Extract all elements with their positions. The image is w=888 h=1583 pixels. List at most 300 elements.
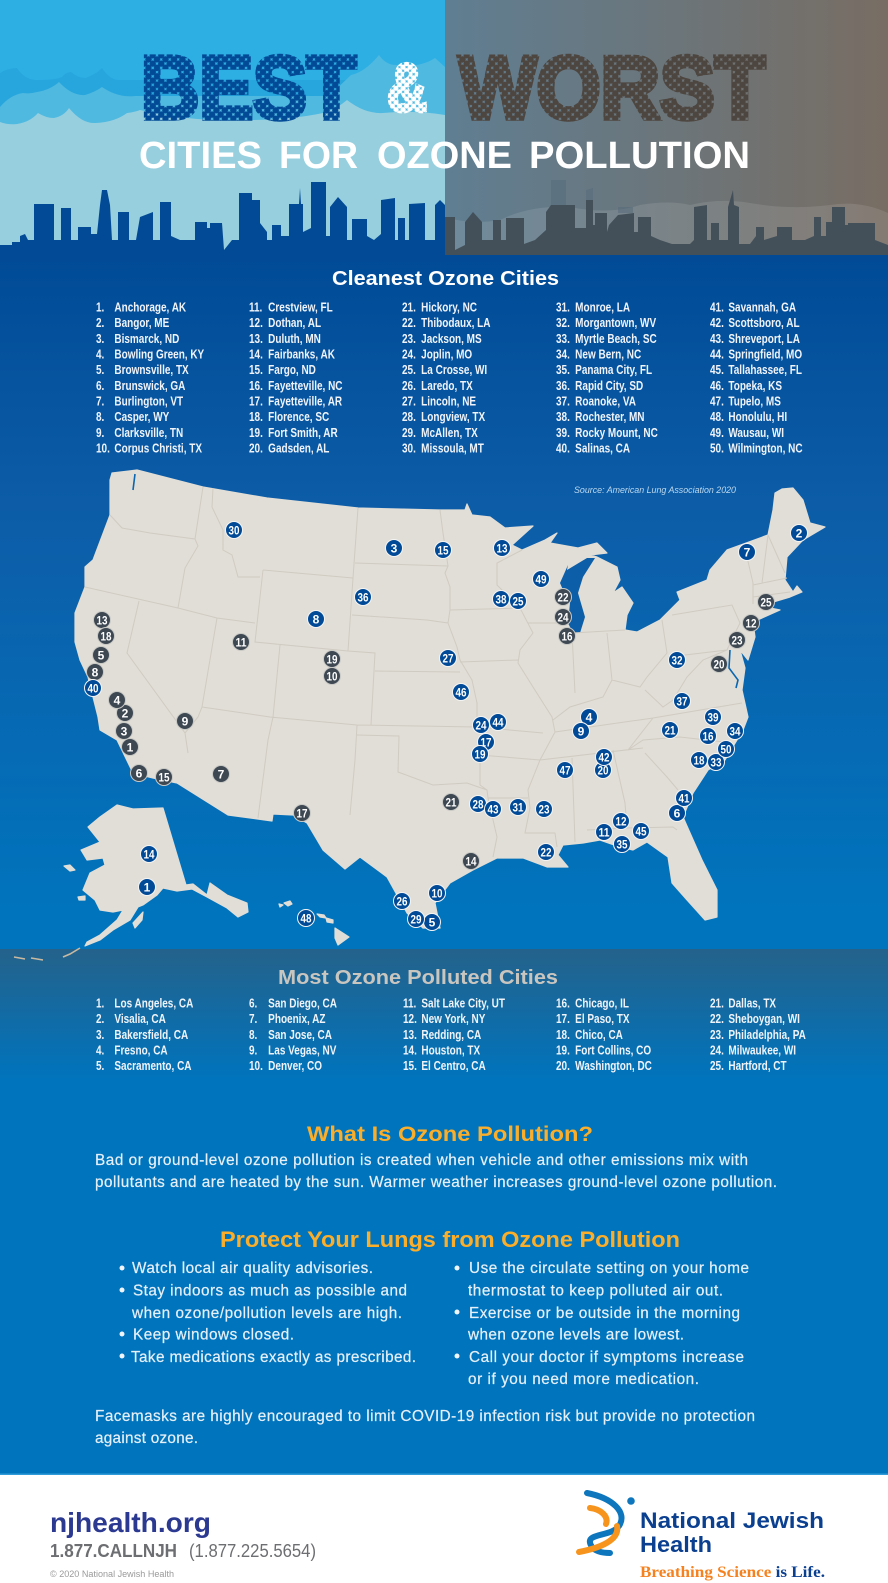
marker 13 Redding: 13: [96, 614, 108, 628]
column 31-40: 34.: [556, 349, 570, 362]
column 21-25: Milwaukee, WI: [728, 1045, 796, 1058]
marker 17 Fayetteville AR: 17: [480, 736, 492, 750]
marker 16 Fayetteville NC: [700, 728, 716, 744]
column 1-10: 3.: [96, 333, 104, 346]
marker 20 Washington: [710, 656, 728, 672]
column 11-15: Salt Lake City, UT: [421, 998, 505, 1011]
column 1-10: 5.: [96, 364, 104, 378]
column 1-10: 1.: [96, 302, 104, 315]
column 1-10: Brownsville, TX: [114, 364, 189, 378]
marker 6 San Diego: 6: [136, 766, 143, 780]
column 41-50: Savannah, GA: [728, 302, 796, 315]
column 31-40: [556, 302, 658, 456]
source note: Source: American Lung Association 2020: [574, 485, 737, 496]
column 11-20: Crestview, FL: [268, 302, 333, 315]
column 11-20: Dothan, AL: [268, 317, 321, 331]
marker 7 Burlington: [738, 544, 756, 560]
tagline: Breathing Science is Life.: [640, 1564, 825, 1581]
marker 25 Hartford: 25: [760, 596, 772, 610]
column 21-30: Laredo, TX: [421, 380, 473, 393]
column 16-20: 16.: [556, 998, 570, 1011]
column 1-10: Clarksville, TN: [114, 427, 183, 440]
column 21-30: 23.: [402, 333, 416, 346]
column 1-10: 9.: [96, 427, 104, 440]
contiguous states outline: [75, 470, 825, 928]
marker 22 Thibodaux: 22: [540, 846, 552, 860]
marker 24 Milwaukee: [554, 608, 572, 626]
marker 5 Brownsville: [424, 914, 440, 930]
marker 18 Florence: [690, 752, 708, 768]
marker 24 Joplin: [472, 716, 490, 734]
marker 34 New Bern: [726, 722, 744, 740]
marker 2 Bangor: 2: [796, 526, 803, 540]
marker 7 Phoenix: [212, 766, 230, 782]
column 21-30: 25.: [402, 364, 416, 378]
marker 15 El Centro: 15: [158, 770, 170, 784]
marker 14 Fairbanks: 14: [144, 848, 155, 862]
facemask note: against ozone.: [95, 1430, 198, 1447]
marker 4 Bowling Green: [580, 708, 598, 726]
column 31-40: 31.: [556, 302, 570, 315]
marker 43 Shreveport: [484, 800, 502, 818]
bullet list: left column: when ozone/pollution levels are high.: [131, 1305, 402, 1322]
column 31-40: 38.: [556, 411, 570, 425]
column 16-20: Washington, DC: [575, 1060, 652, 1074]
column 21-30: Thibodaux, LA: [421, 317, 491, 331]
marker 2 Visalia: [116, 704, 134, 722]
column 11-20: 19.: [249, 427, 263, 440]
marker 5 Sacramento: [92, 646, 110, 664]
marker 4 Fresno: 4: [114, 694, 121, 708]
column 41-50: 44.: [710, 349, 724, 362]
marker 1 Los Angeles: [122, 738, 138, 756]
marker 9 Las Vegas: [176, 712, 194, 730]
column 11-15: Redding, CA: [421, 1029, 481, 1042]
marker 26 Laredo: [394, 892, 410, 910]
column 16-20: [556, 998, 652, 1074]
clean sky, left half: [0, 0, 445, 262]
marker 11 Salt Lake City: [232, 634, 250, 650]
column 21-30: Jackson, MS: [421, 333, 482, 346]
column 41-50: Tupelo, MS: [728, 396, 781, 409]
marker 7 Phoenix: 7: [218, 768, 225, 782]
column 1-5: 5.: [96, 1060, 104, 1074]
bullet list: right column: Call your doctor if symptoms increase: [469, 1349, 744, 1366]
marker 48 Honolulu: [298, 910, 314, 926]
marker 19 Fort Collins: 19: [326, 652, 338, 666]
marker 25 La Crosse: 25: [512, 594, 524, 608]
column 21-25: Sheboygan, WI: [728, 1013, 800, 1027]
marker 50 Wilmington: 50: [720, 742, 732, 756]
marker 6 San Diego: [130, 764, 148, 782]
marker 37 Roanoke: [674, 692, 690, 710]
column 21-25: 24.: [710, 1045, 724, 1058]
marker 3 Bismarck: 3: [391, 542, 398, 556]
marker 29 McAllen: 29: [410, 912, 422, 926]
column 31-40: 35.: [556, 364, 570, 378]
column 16-20: Fort Collins, CO: [575, 1045, 651, 1058]
column 11-15: 13.: [403, 1029, 417, 1042]
column 21-30: 21.: [402, 302, 416, 315]
marker 20 Gadsden: 20: [598, 764, 609, 778]
column 11-20: 12.: [249, 317, 263, 331]
column 21-25: Dallas, TX: [728, 998, 777, 1011]
column 41-50: Springfield, MO: [728, 349, 802, 362]
phone number: 1.877.CALLNJH: [50, 1541, 177, 1561]
column 31-40: Roanoke, VA: [575, 396, 636, 409]
column 1-5: 3.: [96, 1029, 104, 1042]
column 1-10: 2.: [96, 317, 104, 331]
column 31-40: Morgantown, WV: [575, 317, 657, 331]
marker 13 Redding: [94, 612, 110, 628]
marker 17 El Paso: [294, 804, 310, 822]
marker 41 Savannah: 41: [678, 792, 690, 806]
marker 41 Savannah: [676, 790, 692, 806]
marker 5 Brownsville: 5: [429, 916, 436, 930]
column 41-50: Scottsboro, AL: [728, 317, 800, 331]
column 11-20: Fayetteville, AR: [268, 396, 342, 409]
marker 6 Brunswick: 6: [674, 806, 681, 820]
marker 1 Anchorage: 1: [144, 880, 151, 894]
column 21-25: 25.: [710, 1060, 724, 1074]
subtitle: FOR: [279, 135, 358, 177]
column 31-40: Rocky Mount, NC: [575, 427, 658, 440]
marker 26 Laredo: 26: [396, 894, 408, 908]
column 1-10: 10.: [96, 443, 110, 456]
column 11-20: 18.: [249, 411, 263, 425]
marker 24 Milwaukee: 24: [558, 610, 569, 624]
marker 27 Lincoln: 27: [442, 652, 454, 666]
column 11-20: Duluth, MN: [268, 333, 321, 346]
clouds, front layer and pale sky: [0, 100, 445, 250]
column 21-25: 21.: [710, 998, 724, 1011]
column 1-10: 8.: [96, 411, 104, 425]
smoggy sky, right half: [445, 0, 888, 255]
marker 20 Gadsden: [594, 762, 612, 778]
column 31-40: 37.: [556, 396, 570, 409]
bullet list: right column: when ozone levels are lowest.: [467, 1326, 684, 1344]
heading: protect your lungs: Protect Your Lungs from Ozone Pollution: [220, 1227, 680, 1252]
marker 3 Bismarck: [386, 540, 402, 556]
list: most polluted cities: [96, 998, 806, 1074]
marker 19 Fort Smith: [472, 746, 488, 762]
column 11-15: 14.: [403, 1045, 417, 1058]
column 11-20: 16.: [249, 380, 263, 393]
marker 7 Burlington: 7: [744, 546, 751, 560]
column 6-10: Las Vegas, NV: [268, 1045, 337, 1058]
column 31-40: Salinas, CA: [575, 443, 630, 456]
marker 22 Thibodaux: [538, 844, 554, 860]
column 21-30: Longview, TX: [421, 411, 486, 425]
marker 40 Salinas: 40: [88, 682, 99, 696]
column 41-50: 46.: [710, 380, 724, 393]
marker 12 New York: 12: [746, 616, 757, 630]
column 11-20: Fort Smith, AR: [268, 427, 338, 440]
marker 23 Philadelphia: 23: [732, 634, 743, 648]
column 6-10: [249, 998, 337, 1074]
column 1-10: 6.: [96, 380, 104, 393]
marker 32 Morgantown: 32: [672, 654, 683, 668]
column 21-25: 23.: [710, 1029, 724, 1042]
marker 23 Jackson: [536, 800, 552, 818]
column 16-20: 19.: [556, 1045, 570, 1058]
marker 10 Corpus Christi: [428, 884, 446, 902]
column 16-20: Chico, CA: [575, 1029, 623, 1042]
column 31-40: Rochester, MN: [575, 411, 645, 425]
column 11-20: Fargo, ND: [268, 364, 316, 378]
column 31-40: 32.: [556, 317, 570, 331]
word BEST: BEST: [141, 38, 356, 137]
copyright: © 2020 National Jewish Health: [50, 1569, 174, 1579]
marker 12 Dothan: [612, 812, 630, 830]
column 41-50: Honolulu, HI: [728, 411, 787, 425]
marker 31 Monroe: [510, 798, 526, 816]
bullet list: right column: Exercise or be outside in the morning: [469, 1305, 740, 1322]
smog clouds: [445, 201, 888, 255]
column 41-50: 45.: [710, 364, 724, 378]
column 16-20: 20.: [556, 1060, 570, 1074]
subtitle: [139, 135, 750, 177]
column 1-5: Sacramento, CA: [114, 1060, 191, 1074]
subtitle: POLLUTION: [529, 135, 750, 177]
marker 38 Rochester: 38: [496, 592, 507, 606]
column 41-50: Shreveport, LA: [728, 333, 800, 346]
marker 4 Bowling Green: 4: [586, 710, 593, 724]
column 6-10: 9.: [249, 1045, 257, 1058]
column 1-5: 1.: [96, 998, 104, 1011]
column 11-20: Florence, SC: [268, 411, 329, 425]
marker 21 Hickory: 21: [664, 724, 676, 738]
marker 1 Anchorage: [138, 878, 156, 896]
column 1-10: Bowling Green, KY: [114, 349, 205, 362]
Hawaii: [279, 901, 349, 945]
marker 11 Crestview: 11: [598, 826, 610, 840]
Lake Michigan and Green Bay: [560, 558, 595, 633]
column 31-40: 36.: [556, 380, 570, 393]
bullet list: left column: Watch local air quality advisories.: [132, 1260, 373, 1277]
column 1-10: Brunswick, GA: [114, 380, 185, 393]
bullet list: left column: Keep windows closed.: [133, 1326, 294, 1344]
bullet list: right column: Use the circulate setting on your home: [469, 1260, 749, 1277]
column 6-10: San Diego, CA: [268, 998, 337, 1011]
column 1-5: [96, 998, 193, 1074]
column 11-15: 11.: [403, 998, 416, 1011]
marker 19 Fort Smith: 19: [474, 748, 486, 762]
marker 8 San Jose: [86, 664, 104, 680]
column 11-20: Fairbanks, AK: [268, 349, 336, 362]
logo wordmark: National Jewish: [640, 1508, 824, 1533]
column 16-20: Chicago, IL: [575, 998, 629, 1011]
marker 9 Las Vegas: 9: [182, 714, 189, 728]
marker 16 Fayetteville NC: 16: [702, 730, 714, 744]
marker 39 Rocky Mount: 39: [708, 710, 719, 724]
Chesapeake and Puget Sound waters: [133, 474, 738, 688]
logo wordmark line 2: Health: [640, 1532, 712, 1557]
column 21-30: Lincoln, NE: [421, 396, 477, 409]
marker 5 Sacramento: 5: [98, 648, 105, 662]
marker 9 Clarksville: [572, 722, 590, 740]
column 21-30: 26.: [402, 380, 416, 393]
column 21-30: 27.: [402, 396, 416, 409]
marker 32 Morgantown: [668, 652, 686, 668]
marker 11 Crestview: [596, 824, 612, 840]
column 21-30: Missoula, MT: [421, 443, 484, 456]
bullet list: right column: thermostat to keep polluted air out.: [468, 1283, 723, 1300]
marker 28 Longview: 28: [472, 798, 484, 812]
column 11-15: El Centro, CA: [421, 1060, 486, 1074]
column 1-10: 4.: [96, 349, 104, 362]
bullet list: left column: Stay indoors as much as possible and: [133, 1283, 407, 1300]
facemask note: [95, 1408, 755, 1447]
column 11-15: New York, NY: [421, 1013, 486, 1027]
ampersand: &: [387, 50, 427, 126]
marker 43 Shreveport: 43: [488, 802, 499, 816]
column 1-10: Bangor, ME: [114, 317, 170, 331]
marker 8 Casper: [308, 610, 324, 628]
column 31-40: Monroe, LA: [575, 302, 630, 315]
marker 46 Topeka: 46: [456, 686, 467, 700]
column 31-40: 39.: [556, 427, 570, 440]
column 1-10: Casper, WY: [114, 411, 170, 425]
marker 36 Rapid City: [354, 588, 372, 606]
column 31-40: New Bern, NC: [575, 349, 641, 362]
marker 13 Duluth: [494, 540, 510, 556]
paragraph: what is ozone pollution: [95, 1152, 777, 1191]
Alaska: [64, 805, 248, 946]
marker 9 Clarksville: 9: [578, 724, 585, 738]
column 1-5: Visalia, CA: [114, 1013, 166, 1027]
marker 25 Hartford: [758, 594, 774, 610]
column 11-15: 15.: [403, 1060, 417, 1074]
column 31-40: Panama City, FL: [575, 364, 652, 378]
paragraph: what is ozone pollution: Bad or ground-level ozone pollution is created when vehicle and other emissions mix with: [95, 1152, 748, 1169]
column 1-5: Bakersfield, CA: [114, 1029, 188, 1042]
clouds, middle layer: [0, 55, 445, 130]
marker 21 Dallas: [442, 794, 460, 810]
marker 4 Fresno: [108, 692, 126, 708]
marker 17 El Paso: 17: [296, 806, 308, 820]
column 21-30: Joplin, MO: [421, 349, 472, 362]
marker 14 Fairbanks: [140, 846, 158, 862]
marker 34 New Bern: 34: [730, 724, 741, 738]
Aleutian islands: [14, 948, 80, 960]
marker 36 Rapid City: 36: [358, 590, 369, 604]
title: BEST & WORST: [141, 38, 765, 137]
column 41-50: Wausau, WI: [728, 427, 784, 440]
marker 22 Sheboygan: 22: [558, 590, 569, 604]
marker 2 Bangor: [790, 524, 808, 542]
marker 31 Monroe: 31: [512, 800, 524, 814]
map markers: polluted cities (gray): [86, 588, 774, 870]
column 16-20: 17.: [556, 1013, 570, 1027]
marker 38 Rochester: [492, 590, 510, 608]
column 11-20: 11.: [249, 302, 262, 315]
marker 49 Wausau: 49: [536, 572, 547, 586]
column 11-15: Houston, TX: [421, 1045, 481, 1058]
marker 12 New York: [742, 614, 760, 632]
marker 18 Chico: 18: [100, 630, 112, 644]
marker 17 Fayetteville AR: [478, 734, 494, 750]
column 41-50: 49.: [710, 427, 724, 440]
logo: DNA helix mark: [579, 1493, 635, 1553]
bullet list: left column: [120, 1260, 416, 1366]
polluted band background: [0, 949, 888, 1080]
column 41-50: 50.: [710, 443, 724, 456]
marker 50 Wilmington: [718, 740, 734, 758]
marker 16 Chicago: [558, 628, 576, 644]
marker 12 Dothan: 12: [616, 814, 627, 828]
marker 42 Scottsboro: 42: [598, 750, 610, 764]
column 6-10: 6.: [249, 998, 257, 1011]
marker 35 Panama City: 35: [616, 838, 628, 852]
column 1-5: Los Angeles, CA: [114, 998, 193, 1011]
column 1-10: [96, 302, 205, 456]
column 21-30: La Crosse, WI: [421, 364, 487, 378]
column 41-50: 41.: [710, 302, 724, 315]
marker 28 Longview: [470, 796, 486, 812]
column 11-15: [403, 998, 505, 1074]
marker 3 Bakersfield: 3: [121, 724, 128, 738]
marker 14 Houston: 14: [466, 854, 477, 868]
marker 48 Honolulu: 48: [300, 912, 312, 926]
column 21-25: Hartford, CT: [728, 1060, 787, 1074]
word WORST: WORST: [459, 38, 765, 137]
marker 39 Rocky Mount: [704, 708, 722, 726]
column 6-10: 8.: [249, 1029, 257, 1042]
marker 14 Houston: [462, 852, 480, 870]
marker 15 Fargo: [434, 542, 452, 558]
column 21-30: 28.: [402, 411, 416, 425]
column 1-10: 7.: [96, 396, 104, 409]
column 41-50: Tallahassee, FL: [728, 364, 802, 378]
marker 33 Myrtle Beach: [708, 754, 724, 770]
marker 27 Lincoln: [440, 650, 456, 666]
column 21-30: McAllen, TX: [421, 427, 478, 440]
map markers: cleanest cities (blue): [84, 522, 808, 930]
footer: [0, 1474, 888, 1583]
column 1-5: 2.: [96, 1013, 104, 1027]
column 41-50: 48.: [710, 411, 724, 425]
bullet list: right column: or if you need more medication.: [468, 1371, 699, 1388]
column 21-30: [402, 302, 491, 456]
marker 44 Springfield: [490, 714, 506, 730]
column 11-20: Gadsden, AL: [268, 443, 329, 456]
marker 24 Joplin: 24: [476, 718, 487, 732]
marker 29 McAllen: [408, 910, 424, 928]
column 31-40: Myrtle Beach, SC: [575, 333, 657, 346]
column 21-30: 30.: [402, 443, 416, 456]
bullet list: left column: Take medications exactly as prescribed.: [131, 1349, 416, 1366]
marker 3 Bakersfield: [116, 722, 132, 740]
marker 21 Hickory: [662, 722, 678, 738]
column 1-10: Burlington, VT: [114, 396, 183, 409]
marker 40 Salinas: [84, 680, 102, 696]
column 11-20: 14.: [249, 349, 263, 362]
column 21-30: 29.: [402, 427, 416, 440]
marker 11 Salt Lake City: 11: [236, 636, 247, 650]
clean city skyline: [0, 182, 445, 262]
column 41-50: [710, 302, 803, 456]
heading: most polluted cities: Most Ozone Polluted Cities: [278, 966, 558, 989]
marker 20 Washington: 20: [714, 658, 725, 672]
header banner: [0, 0, 888, 262]
list: cleanest cities: [96, 302, 803, 456]
column 6-10: Phoenix, AZ: [268, 1013, 326, 1027]
blue page background: [0, 250, 888, 950]
marker 21 Dallas: 21: [446, 796, 457, 810]
state borders: [85, 487, 790, 857]
marker 16 Chicago: 16: [562, 630, 573, 644]
